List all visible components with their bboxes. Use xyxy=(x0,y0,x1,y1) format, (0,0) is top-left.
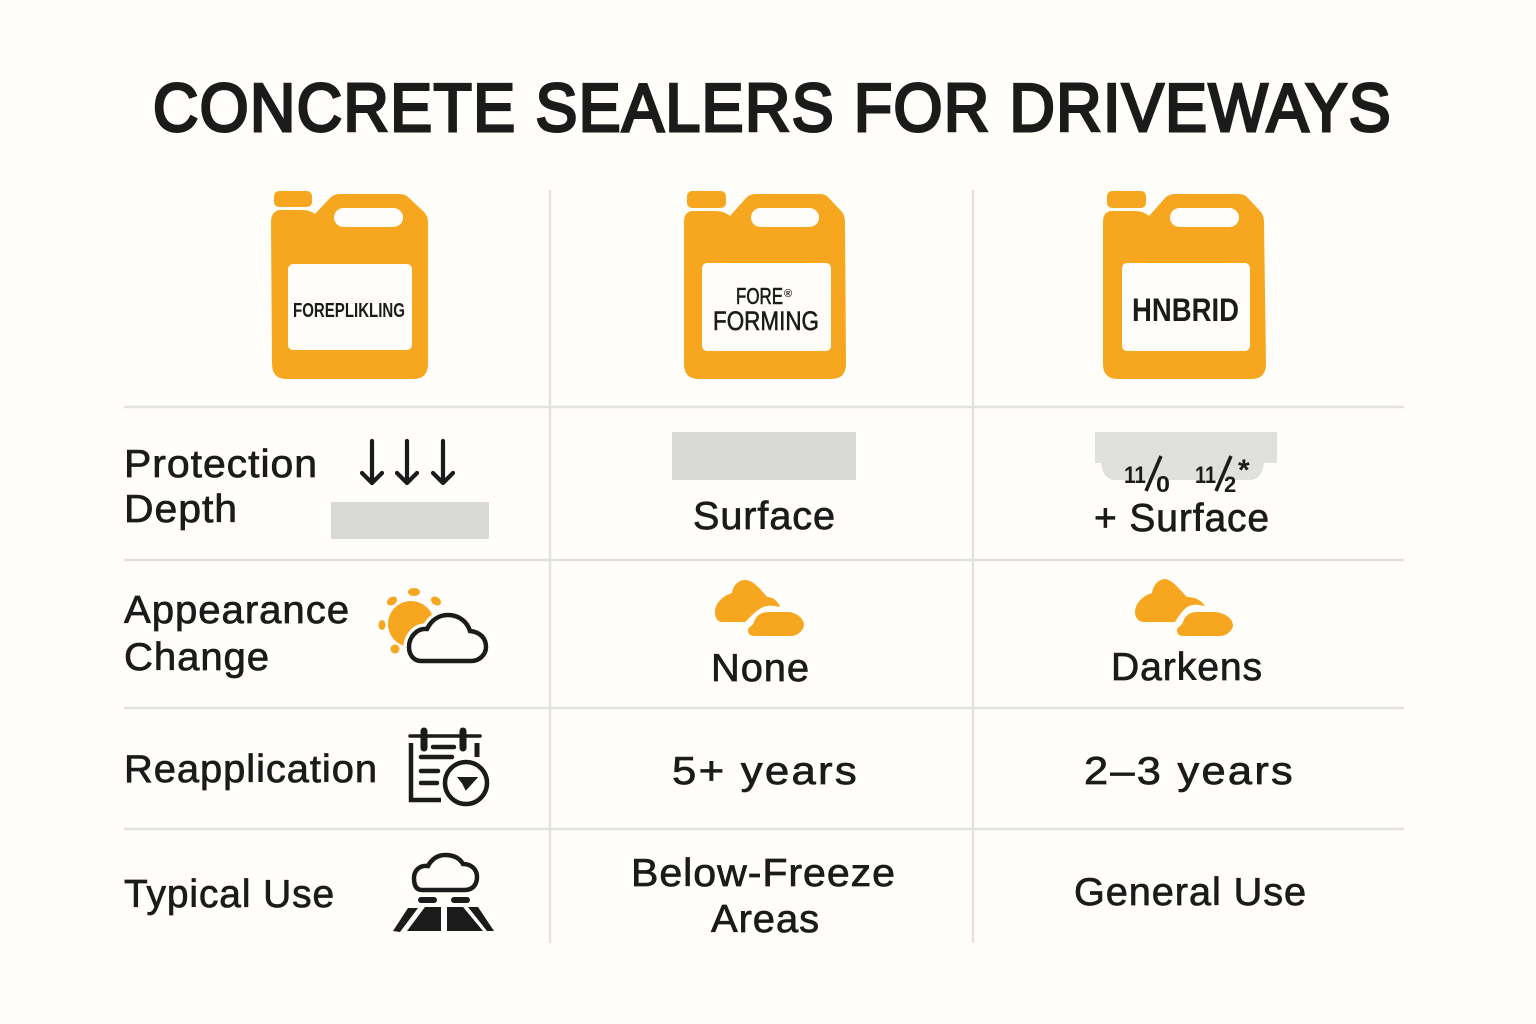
depth marks: hybrid: 11 xyxy=(1195,462,1216,489)
depth marks: hybrid: 0 xyxy=(1156,471,1170,497)
depth marks: hybrid xyxy=(1124,454,1250,497)
row label: appearance change xyxy=(124,589,350,679)
value: below-freeze areas: Below-Freeze xyxy=(631,852,896,895)
depth marks: hybrid: * xyxy=(1238,454,1250,487)
icon: orange clouds darkens xyxy=(1135,579,1233,636)
jug label: hybrid: HNBRID xyxy=(1132,292,1239,328)
value: below-freeze areas: Areas xyxy=(711,898,820,941)
value: darkens: Darkens xyxy=(1111,646,1263,689)
icon: film-forming sealer jug xyxy=(684,191,846,379)
depth bar: hybrid xyxy=(1095,432,1277,480)
jug label: film forming: FORMING xyxy=(713,306,819,336)
row label: protection depth: Protection xyxy=(124,443,318,486)
value: general use: General Use xyxy=(1074,871,1307,914)
row label: protection depth: Depth xyxy=(124,488,238,531)
row label: typical use: Typical Use xyxy=(124,873,335,916)
icon: hybrid sealer jug xyxy=(1103,191,1266,379)
jug label: film forming: ® xyxy=(784,288,792,300)
value: plus surface: + Surface xyxy=(1094,497,1270,540)
depth marks: hybrid: 11 xyxy=(1124,462,1146,489)
value: two to three years: 2–3 years xyxy=(1084,750,1295,793)
depth bar: penetrating xyxy=(331,502,489,539)
row label: appearance change: Appearance xyxy=(124,589,350,632)
icon: sun and cloud xyxy=(378,588,486,661)
icon: orange clouds none xyxy=(715,580,804,636)
depth bar: film forming xyxy=(672,432,856,480)
jug label: film forming xyxy=(713,283,819,336)
value: below-freeze areas xyxy=(631,852,896,941)
icon: penetrating sealer jug xyxy=(271,191,428,379)
row label: appearance change: Change xyxy=(124,636,270,679)
depth marks: hybrid: 2 xyxy=(1224,472,1236,497)
jug label: penetrating: FOREPLIKLING xyxy=(293,300,405,322)
value: surface: Surface xyxy=(693,495,836,538)
value: five plus years: 5+ years xyxy=(672,750,859,793)
value: none: None xyxy=(711,647,810,690)
title: CONCRETE SEALERS FOR DRIVEWAYS xyxy=(153,70,1392,146)
icon: three down arrows xyxy=(362,441,453,483)
row label: protection depth xyxy=(124,443,318,531)
row label: reapplication: Reapplication xyxy=(124,748,378,791)
icon: cloud over road xyxy=(393,855,494,932)
icon: calendar with clock xyxy=(410,731,487,804)
jug label: film forming: FORE xyxy=(736,283,783,309)
